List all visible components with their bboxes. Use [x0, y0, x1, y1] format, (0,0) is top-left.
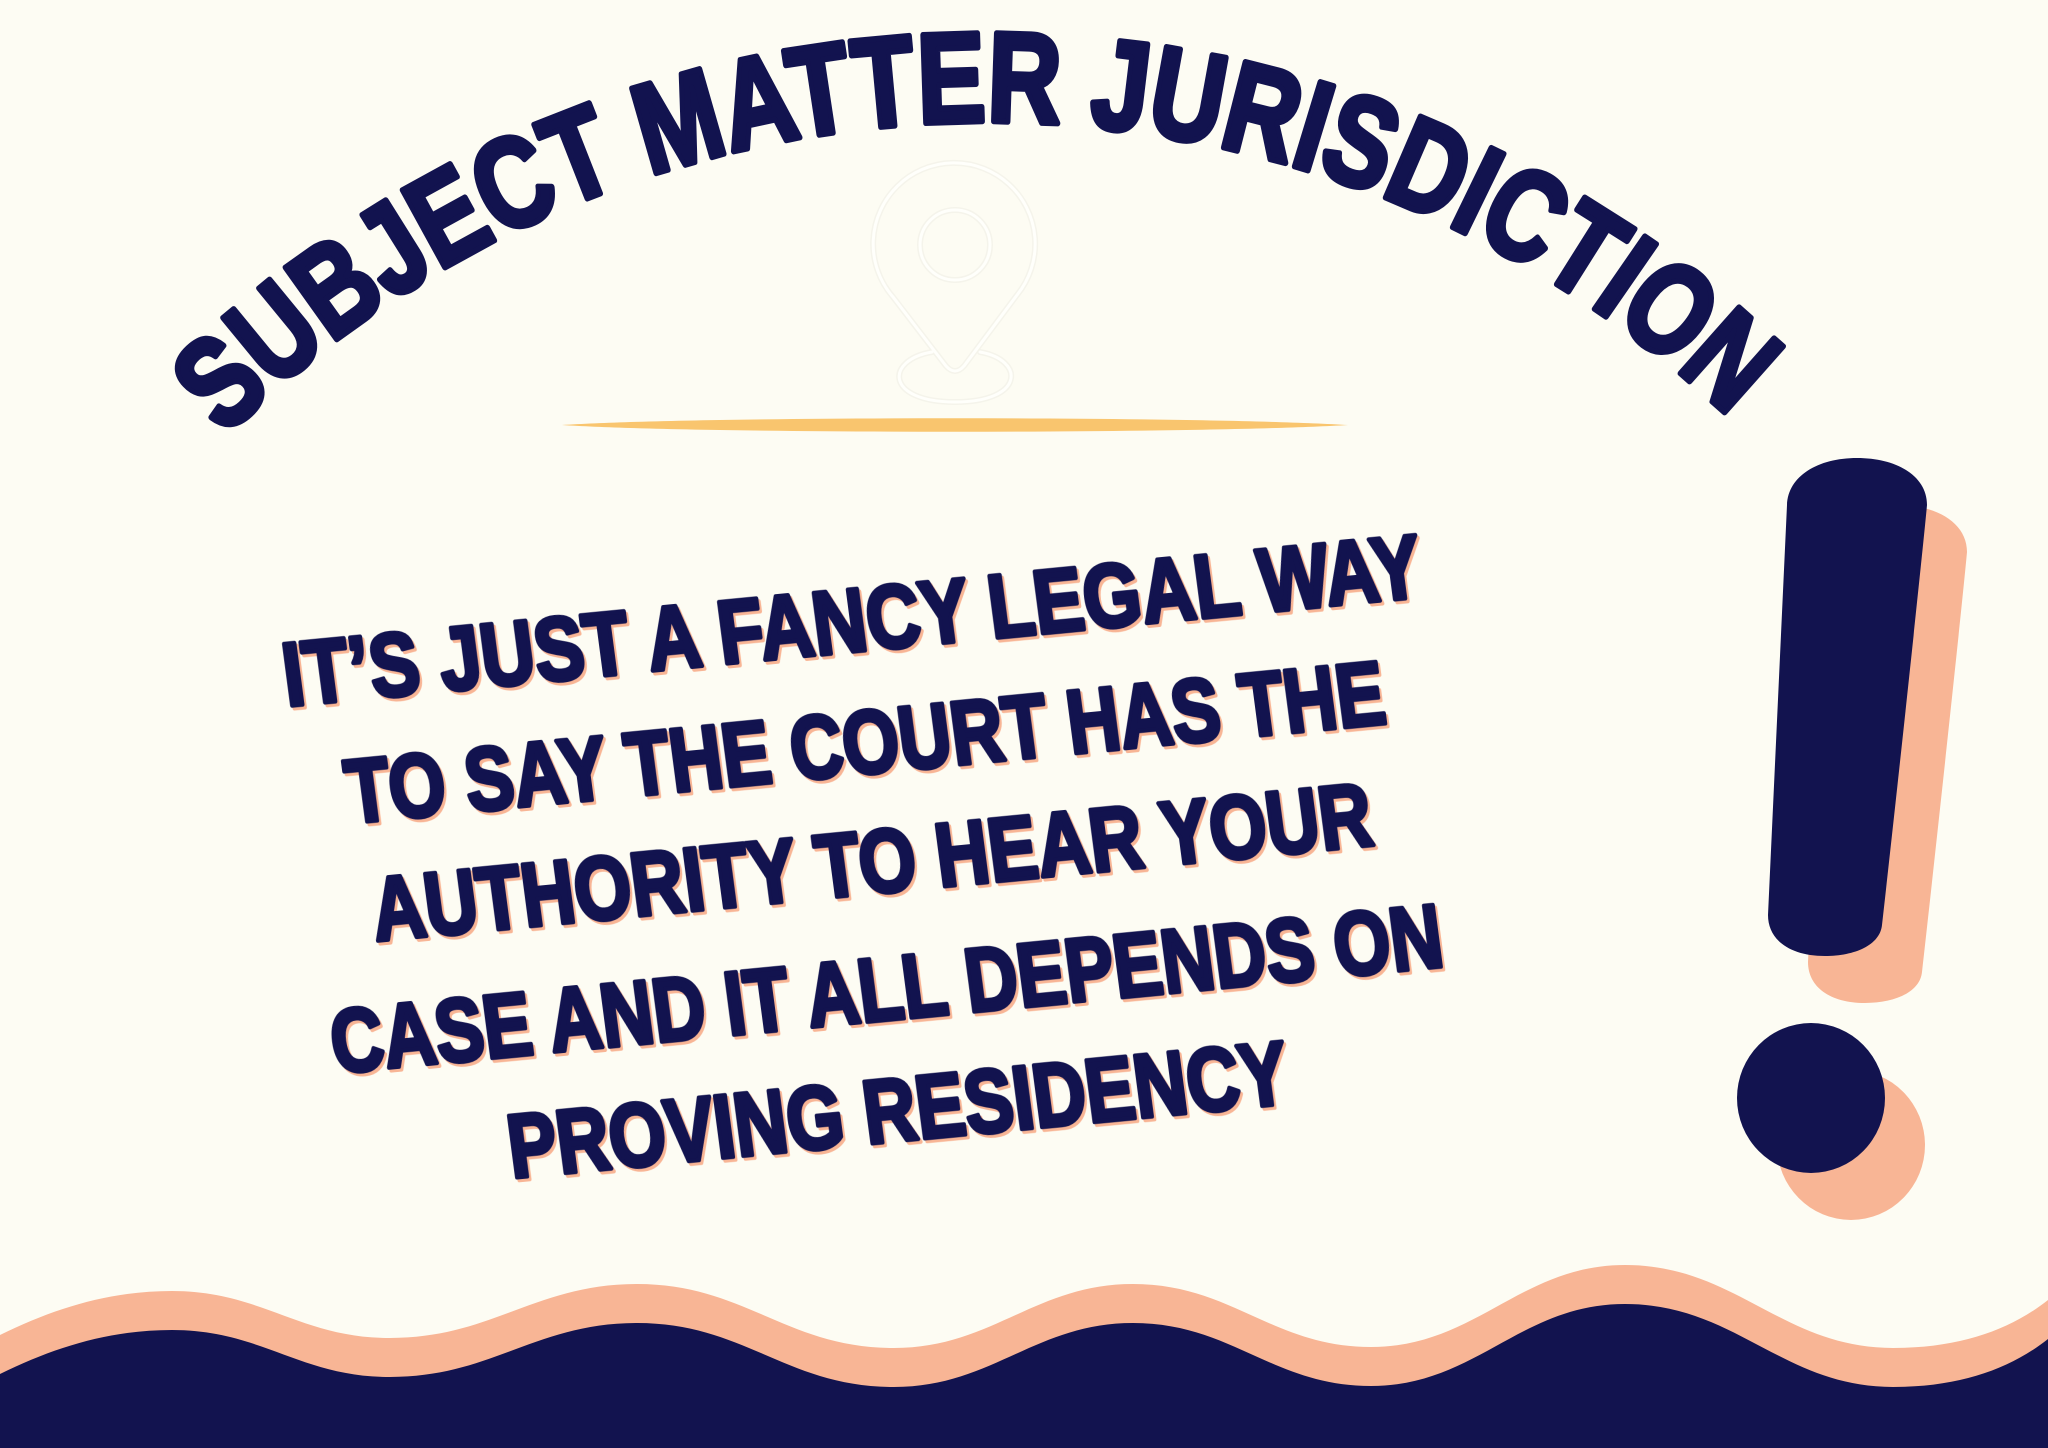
- wave: navy band: [0, 1304, 2048, 1448]
- divider: tapered yellow line: [562, 418, 1348, 432]
- icon: faint location pin: [873, 163, 1035, 402]
- line 1: IT’S JUST A FANCY LEGAL WAY: [277, 517, 1427, 726]
- text block: explanation: [277, 517, 1448, 1198]
- icon: exclamation mark: [1737, 458, 1967, 1220]
- wave: peach band: [0, 1265, 2048, 1448]
- line 3: AUTHORITY TO HEAR YOUR: [366, 765, 1378, 961]
- exclamation body: [1737, 458, 1927, 1173]
- line 2: TO SAY THE COURT HAS THE: [340, 644, 1391, 843]
- title: curved heading: SUBJECT MATTER JURISDICTION: [174, 30, 1786, 428]
- line 5: PROVING RESIDENCY: [502, 1024, 1294, 1198]
- exclamation shadow: [1777, 505, 1967, 1220]
- line 4: CASE AND IT ALL DEPENDS ON: [325, 887, 1448, 1093]
